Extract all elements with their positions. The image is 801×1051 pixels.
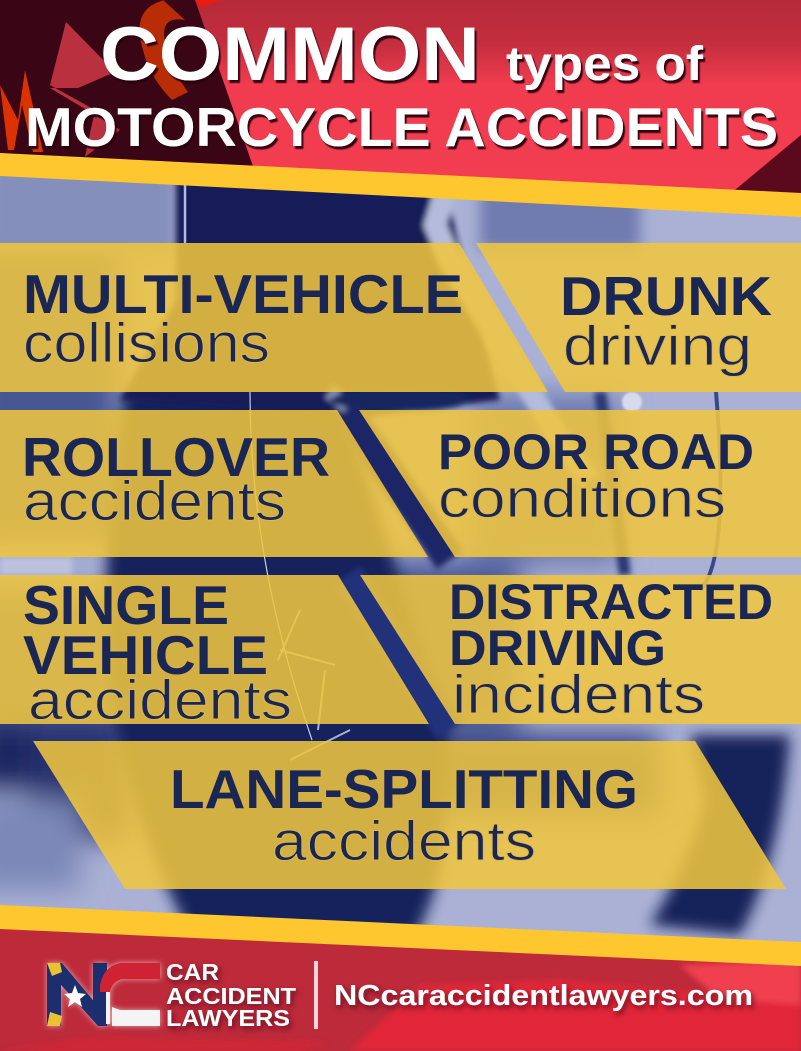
panel: single vehicle accidents [0,574,429,731]
logo wordmark: ACCIDENT [166,983,296,1009]
panel: poor road conditions [359,410,801,557]
logo wordmark [166,959,296,1031]
panel: multi-vehicle collisions [0,243,548,392]
top yellow band [0,153,801,217]
panel: rollover accidents: ROLLOVER [22,426,330,488]
panel: single vehicle accidents: SINGLE [23,574,229,636]
website url: NCcaraccidentlawyers.com [334,980,753,1012]
panel: poor road conditions: conditions [438,467,726,529]
panel: drunk driving: DRUNK [560,265,772,327]
title: MOTORCYCLE ACCIDENTS [25,96,778,158]
title: COMMON [100,12,480,97]
panel: lane-splitting accidents: accidents [272,809,536,872]
logo wordmark: LAWYERS [166,1005,290,1031]
header red background [0,0,801,200]
panel: poor road conditions: POOR ROAD [438,424,754,480]
panel: lane-splitting accidents [33,741,786,889]
title [25,12,778,158]
panel: rollover accidents [0,410,428,557]
panel: distracted driving incidents: incidents [452,663,705,725]
bottom red footer background [0,927,801,1051]
icon: NC logo [47,963,160,1026]
panel: distracted driving incidents: DRIVING [449,620,666,676]
panel: lane-splitting accidents: LANE-SPLITTING [170,758,638,820]
logo wordmark: CAR [166,959,219,985]
title: types of [506,38,704,91]
panel: distracted driving incidents: DISTRACTED [449,574,773,630]
panel: rollover accidents: accidents [23,469,286,532]
panel: multi-vehicle collisions: collisions [23,311,270,374]
panel: distracted driving incidents [360,574,801,725]
bottom yellow band [0,905,801,966]
motorcycle photo background [0,165,801,960]
panel: single vehicle accidents: accidents [28,668,292,731]
panel: drunk driving: driving [563,314,752,377]
panel: drunk driving [476,243,801,392]
panel: single vehicle accidents: VEHICLE [23,624,268,686]
panel: multi-vehicle collisions: MULTI-VEHICLE [23,263,463,325]
